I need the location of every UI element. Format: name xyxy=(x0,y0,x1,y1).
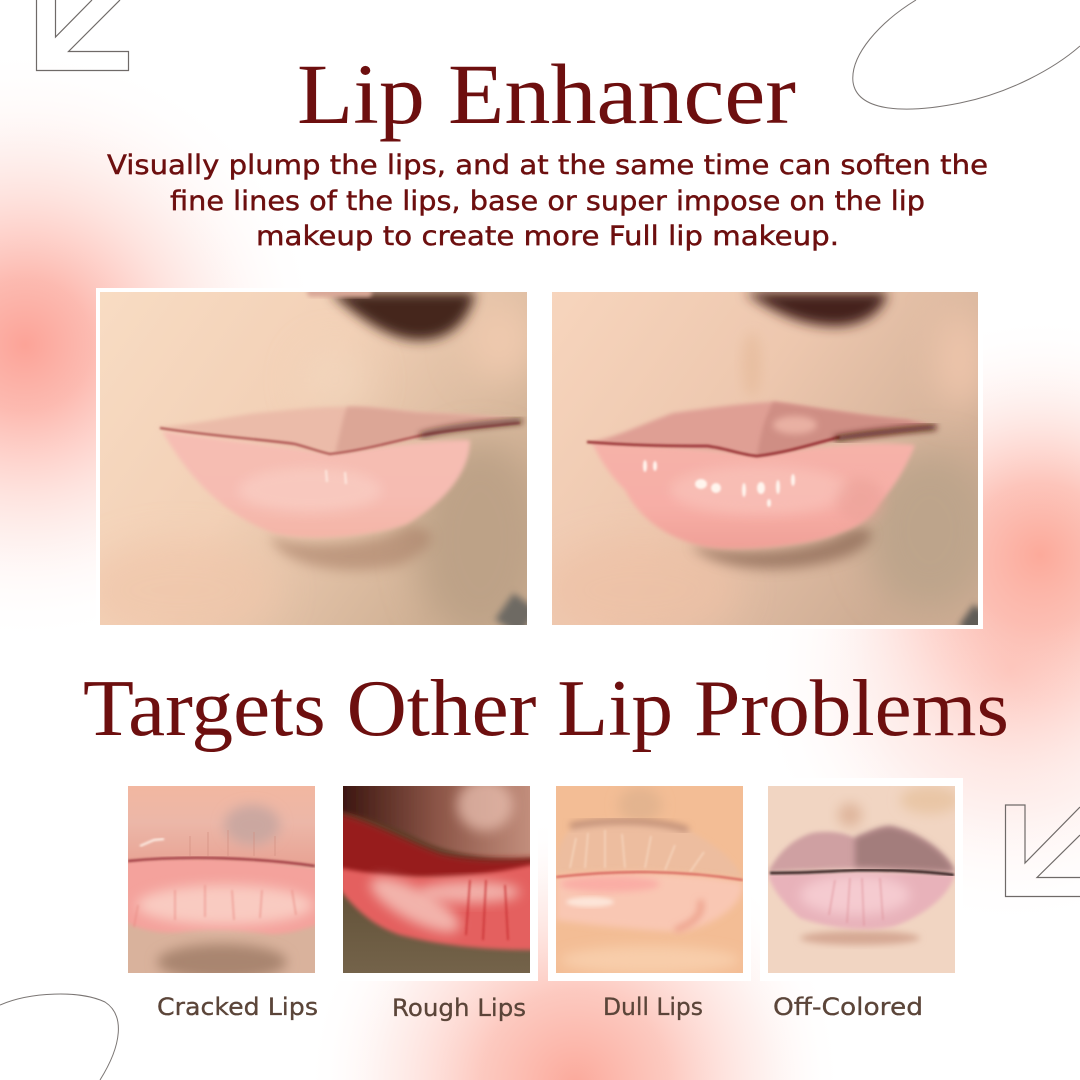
decoration: top-left outline arrow xyxy=(36,0,128,70)
photo: before lips xyxy=(96,288,527,625)
photo: after lips xyxy=(540,288,995,640)
gloss highlights xyxy=(643,460,795,507)
title: Lip Enhancer xyxy=(297,46,796,142)
description text: fine lines of the lips, base or super impose on the lip xyxy=(170,186,925,217)
description text xyxy=(107,150,988,252)
upper lip xyxy=(594,400,830,454)
white frames behind small photos xyxy=(120,778,963,981)
mouth xyxy=(335,812,535,880)
lower lip xyxy=(556,873,743,932)
description text: Visually plump the lips, and at the same time can soften the xyxy=(107,150,988,181)
upper lip xyxy=(558,826,738,874)
nose shadow xyxy=(330,292,475,340)
chin shadow xyxy=(690,528,872,569)
description text: makeup to create more Full lip makeup. xyxy=(256,221,839,252)
lower lip xyxy=(126,859,317,934)
lower lip xyxy=(768,872,955,929)
lower lip xyxy=(162,431,470,538)
heading: targets other lip problems: Targets Other Lip Problems xyxy=(83,665,1009,753)
upper lip xyxy=(768,827,955,872)
decoration: bottom-left curve xyxy=(0,994,118,1080)
photo: cracked lips xyxy=(128,786,315,973)
lower lip xyxy=(592,442,915,549)
decoration: top-right curve xyxy=(853,0,1080,109)
photo: off-colored lips xyxy=(768,786,960,973)
label: cracked lips: Cracked Lips xyxy=(157,993,318,1021)
label: off-colored: Off-Colored xyxy=(773,993,923,1021)
photo: rough lips xyxy=(335,779,535,973)
upper lip xyxy=(340,780,535,859)
photo: dull lips xyxy=(556,786,743,974)
label: rough lips: Rough Lips xyxy=(392,994,526,1022)
lower lip xyxy=(340,864,535,950)
decoration: right outline arrow xyxy=(1006,805,1080,896)
label: dull lips: Dull Lips xyxy=(603,993,703,1021)
nose shadow xyxy=(745,292,887,326)
upper lip xyxy=(166,406,346,452)
chin shadow xyxy=(270,525,431,570)
mouth line xyxy=(160,423,520,454)
mouth line xyxy=(587,437,840,456)
